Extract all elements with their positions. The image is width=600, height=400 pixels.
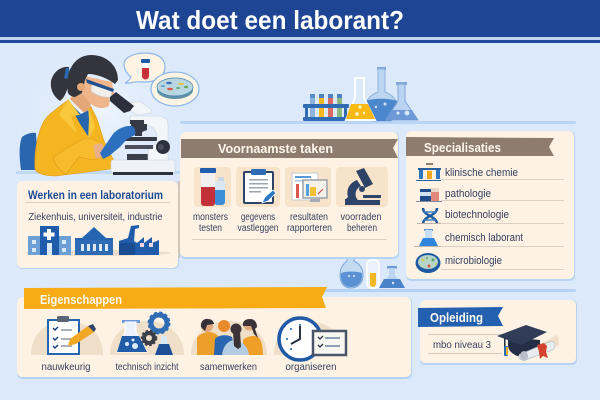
panel: voornaamste taken	[178, 132, 399, 259]
laboratory scientist illustration	[16, 55, 180, 176]
trait: nauwkeurig	[31, 316, 103, 373]
ear	[77, 83, 85, 91]
label: samenwerken	[200, 361, 257, 373]
small conical flask	[386, 82, 418, 120]
coat	[35, 100, 118, 176]
panel: opleiding	[418, 300, 577, 365]
item: biotechnologie	[417, 208, 509, 224]
label: voorraden	[340, 212, 382, 223]
round flask blue	[365, 67, 398, 121]
heading: Werken in een laboratorium	[28, 190, 163, 202]
task: voorraden beheren	[336, 167, 388, 234]
yellow conical flask	[346, 78, 375, 120]
heading: Specialisaties	[424, 141, 501, 155]
label: technisch inzicht	[116, 361, 179, 373]
icon: factory	[119, 225, 159, 255]
neck	[70, 90, 92, 118]
collar	[59, 99, 80, 133]
label: beheren	[347, 223, 377, 234]
microscope	[110, 92, 175, 175]
task: gegevens vastleggen	[236, 167, 280, 234]
thought bubble: petri dish	[151, 72, 199, 106]
label: monsters	[193, 212, 228, 223]
test tube rack	[303, 94, 349, 121]
item: microbiologie: microbiologie	[445, 255, 502, 267]
heading band	[418, 307, 503, 327]
ponytail	[51, 67, 69, 101]
conical flask	[379, 266, 405, 288]
label	[238, 212, 278, 234]
label	[287, 212, 332, 234]
item: klinische chemie: klinische chemie	[445, 167, 518, 179]
trait: samenwerken	[191, 319, 267, 373]
label: organiseren	[286, 361, 337, 373]
item: microbiologie	[416, 253, 502, 273]
title: Wat doet een laborant?	[136, 5, 404, 35]
hair	[67, 55, 118, 97]
shirt	[67, 100, 90, 139]
label: gegevens	[241, 212, 275, 223]
text: mbo niveau 3: mbo niveau 3	[433, 339, 491, 351]
lab glassware on shelf	[303, 67, 418, 121]
heading band	[181, 139, 398, 158]
icon: hospital	[28, 226, 71, 255]
trait: technisch inzicht	[110, 312, 184, 373]
glove	[100, 126, 135, 159]
item: chemisch laborant: chemisch laborant	[445, 232, 523, 244]
heading: Eigenschappen	[40, 293, 122, 307]
panel: werken in een laboratorium	[17, 181, 179, 269]
header banner	[0, 0, 600, 43]
item: biotechnologie: biotechnologie	[445, 209, 509, 221]
shelf line top	[180, 121, 576, 124]
trait: organiseren	[274, 318, 346, 373]
item: pathologie	[416, 188, 491, 202]
icon: university	[75, 227, 113, 255]
heading band	[24, 287, 327, 309]
label: rapporteren	[287, 223, 332, 234]
item: klinische chemie	[416, 163, 518, 181]
task: resultaten rapporteren	[285, 167, 332, 234]
heading band	[406, 137, 554, 156]
label	[193, 212, 228, 234]
item: chemisch laborant	[414, 229, 523, 247]
round flask	[340, 247, 363, 288]
people	[197, 319, 263, 355]
label: resultaten	[290, 212, 328, 223]
goggles	[86, 79, 114, 97]
coat sleeve	[53, 138, 102, 174]
label: testen	[199, 223, 222, 234]
desk	[16, 171, 180, 174]
panel: eigenschappen	[17, 287, 412, 379]
icon: graduation cap and diploma	[497, 325, 559, 361]
chair	[20, 133, 38, 170]
label	[340, 212, 382, 234]
shelf line lower	[320, 289, 576, 292]
face	[82, 76, 114, 108]
location text: Ziekenhuis, universiteit, industrie	[28, 211, 163, 223]
heading: Opleiding	[430, 311, 483, 325]
thought bubble: test tube	[124, 53, 165, 83]
label: nauwkeurig	[42, 361, 91, 373]
item: pathologie: pathologie	[445, 188, 491, 200]
task: monsters testen	[193, 167, 231, 234]
heading: Voornaamste taken	[218, 141, 333, 156]
label: vastleggen	[238, 223, 278, 234]
glassware between panels	[340, 247, 405, 288]
panel: specialisaties	[406, 131, 575, 281]
test tube yellow	[367, 260, 379, 288]
